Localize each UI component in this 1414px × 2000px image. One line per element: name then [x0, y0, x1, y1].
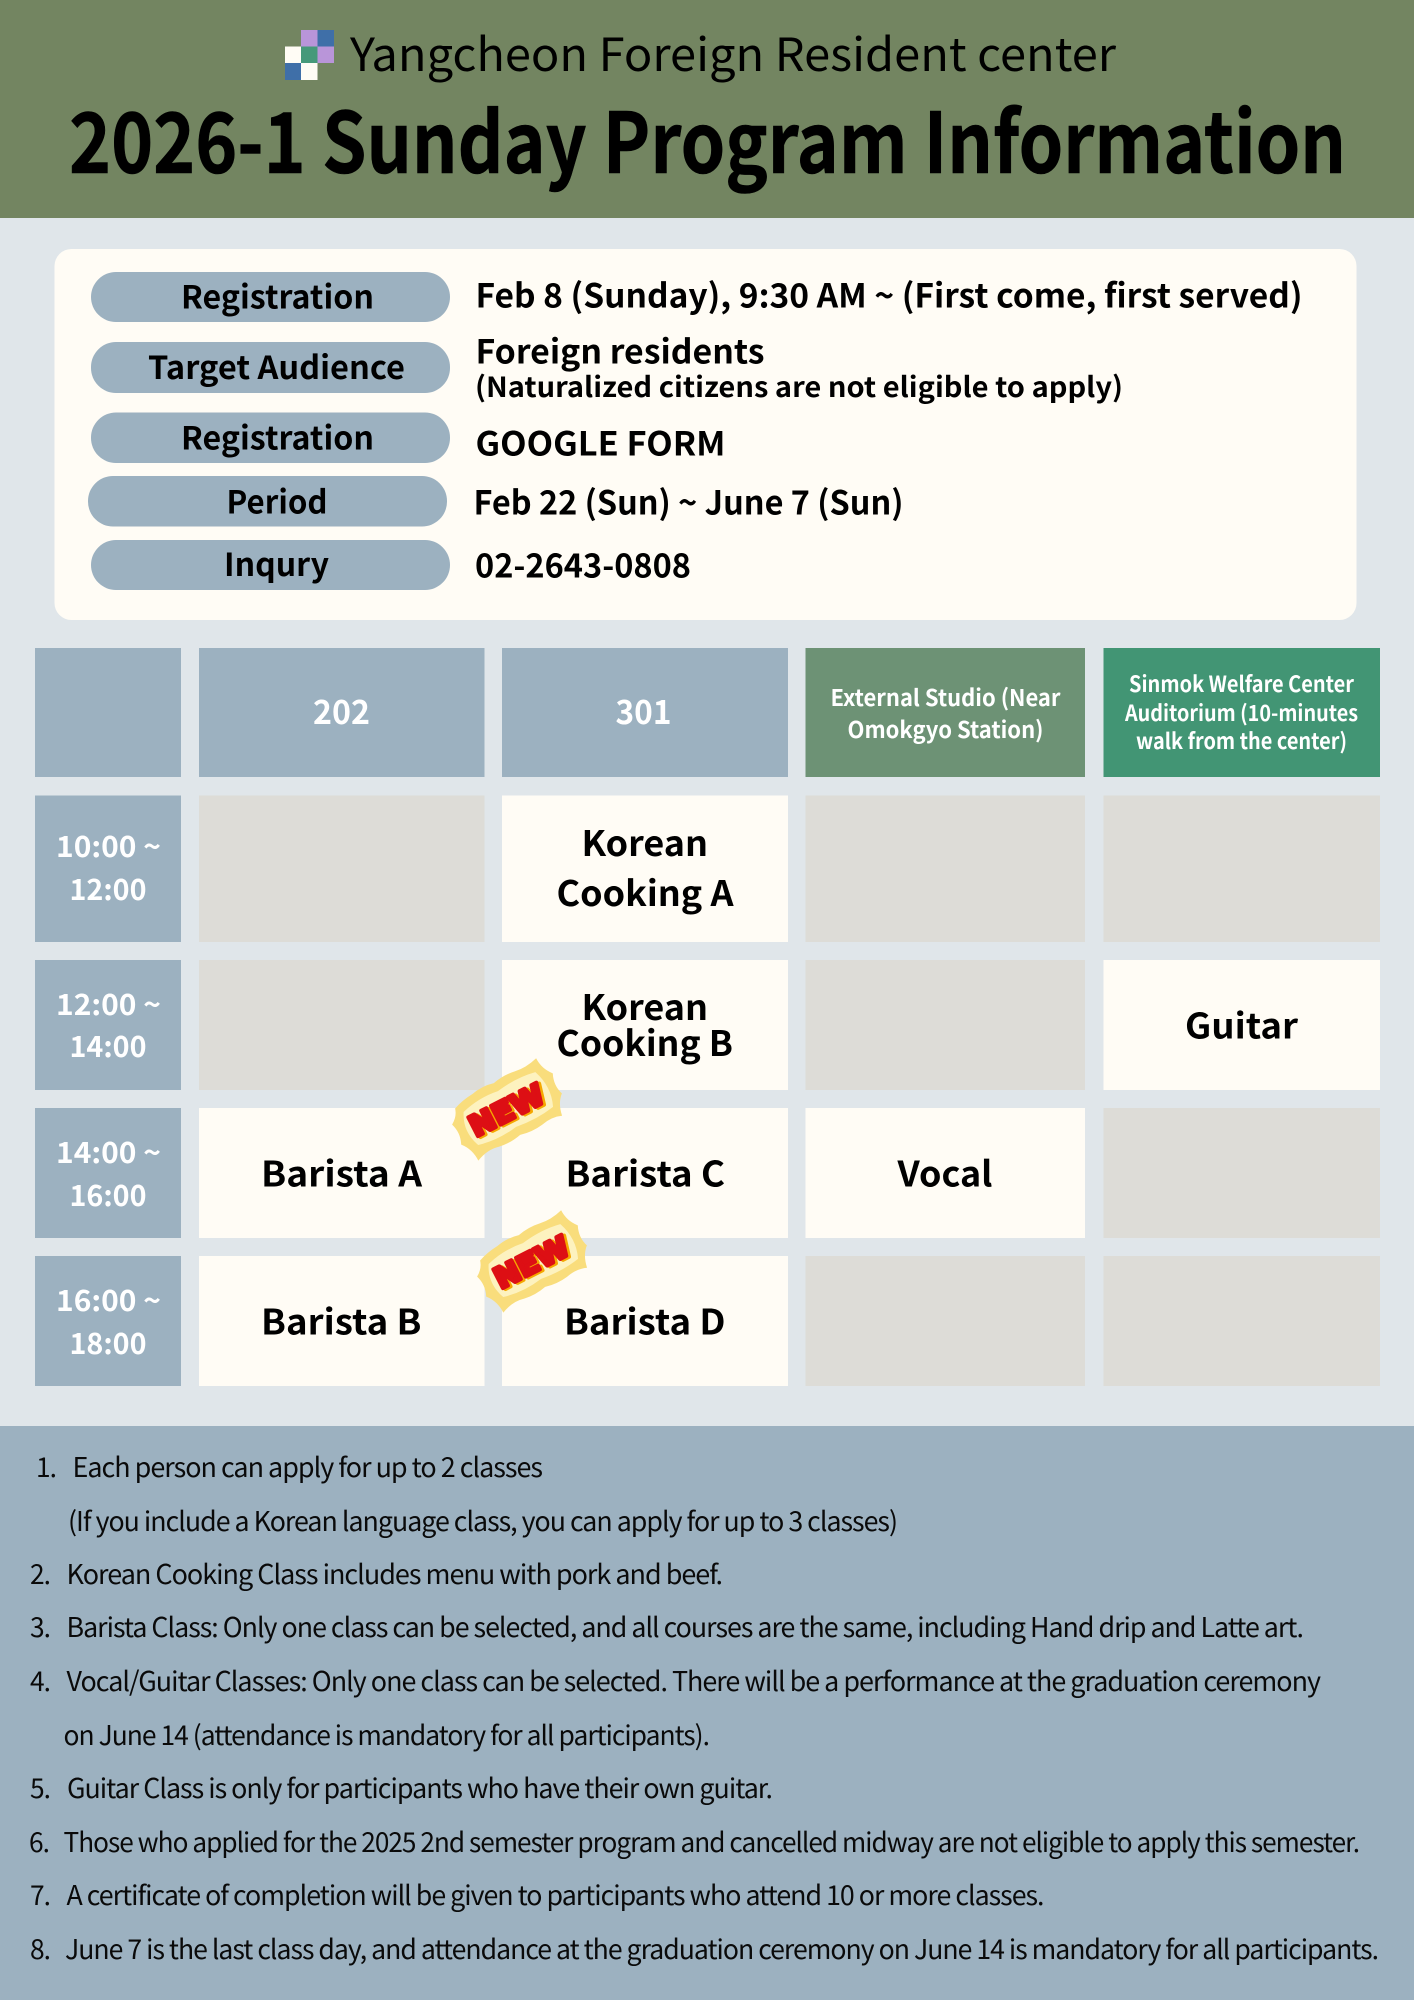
note 3: 3.	[30, 1606, 50, 1645]
table row: 10:00 to 12:00: Korean	[582, 816, 708, 867]
note 6: 6.	[29, 1821, 49, 1860]
badge: NEW on Barista D: NEW	[488, 1229, 575, 1296]
note 1: 1.	[36, 1446, 56, 1485]
table row: 14:00 to 16:00: Barista A	[261, 1146, 423, 1198]
note 4	[30, 1660, 1321, 1753]
note 7: 7.	[30, 1874, 50, 1913]
row: registration date: Feb 8 (Sunday), 9:30 AM ~ (First come, first served)	[476, 270, 1302, 318]
badge: NEW on Barista D: NEW	[491, 1230, 578, 1297]
table row: 10:00 to 12:00: 12:00	[70, 867, 146, 909]
note 8: 8.	[30, 1928, 50, 1967]
note 1: (If you include a Korean language class, you can apply for up to 3 classes)	[68, 1500, 897, 1539]
table header row: External Studio (Near	[830, 679, 1061, 713]
table row: 12:00 to 14:00: 12:00 ~	[56, 982, 161, 1024]
note 5: 5.	[30, 1767, 50, 1806]
table row: 12:00 to 14:00: 14:00	[70, 1024, 146, 1066]
subtitle: center name: Yangcheon Foreign Resident center	[349, 19, 1116, 85]
icon: center logo mosaic	[285, 30, 334, 80]
note 3: Barista Class: Only one class can be selected, and all courses are the same, including Hand drip and Latte art.	[66, 1606, 1303, 1645]
table row: 10:00 to 12:00: 10:00 ~	[56, 824, 161, 866]
row: inquiry	[91, 540, 691, 590]
badge: NEW on Barista C: NEW	[463, 1077, 550, 1144]
table header row	[35, 648, 1380, 777]
table row: 16:00 to 18:00: 16:00 ~	[56, 1278, 161, 1320]
timetable	[35, 648, 1380, 1386]
note 4: 4.	[30, 1660, 50, 1699]
badge: NEW on Barista C	[442, 1055, 573, 1164]
row: registration method: Registration	[181, 414, 374, 460]
note 8: June 7 is the last class day, and attendance at the graduation ceremony on June 14 is mandatory for all participants.	[65, 1928, 1378, 1967]
note 2: 2.	[30, 1553, 50, 1592]
row: registration date	[91, 270, 1302, 322]
row: target audience: Foreign residents	[476, 326, 764, 374]
table header row: Auditorium (10-minutes	[1124, 696, 1358, 728]
table row: 14:00 to 16:00: 16:00	[70, 1173, 146, 1215]
note 2: Korean Cooking Class includes menu with pork and beef.	[66, 1553, 722, 1592]
header banner	[0, 0, 1414, 218]
table row: 14:00 to 16:00: Vocal	[896, 1146, 992, 1198]
table header row: 301	[616, 686, 672, 734]
row: period: Feb 22 (Sun) ~ June 7 (Sun)	[474, 476, 904, 524]
table row: 14:00 to 16:00	[35, 1108, 1380, 1238]
note 6: Those who applied for the 2025 2nd semester program and cancelled midway are not eligible to apply this semester.	[64, 1821, 1359, 1860]
table header row: 202	[313, 686, 370, 734]
table header row: Omokgyo Station)	[848, 711, 1044, 745]
row: registration method: GOOGLE FORM	[476, 418, 726, 466]
row: registration date: Registration	[181, 272, 374, 318]
table header row: Sinmok Welfare Center	[1129, 667, 1354, 699]
note 4: on June 14 (attendance is mandatory for all participants).	[64, 1714, 709, 1753]
panel: notes	[0, 1426, 1414, 2000]
table row: 12:00 to 14:00: Korean	[582, 980, 708, 1031]
table row: 12:00 to 14:00	[35, 960, 1380, 1090]
note 1	[36, 1446, 897, 1539]
table row: 14:00 to 16:00: 14:00 ~	[56, 1130, 161, 1172]
table header row: walk from the center)	[1136, 724, 1347, 756]
table row: 14:00 to 16:00: Barista C	[566, 1146, 725, 1198]
row: target audience: Target Audience	[148, 343, 405, 389]
row: target audience: (Naturalized citizens are not eligible to apply)	[475, 366, 1123, 406]
note 4: Vocal/Guitar Classes: Only one class can be selected. There will be a performance at the graduation ceremony	[66, 1660, 1321, 1699]
table row: 10:00 to 12:00	[35, 796, 1380, 942]
table row: 16:00 to 18:00: Barista D	[564, 1294, 726, 1346]
table row: 16:00 to 18:00: Barista B	[261, 1294, 422, 1346]
table row: 12:00 to 14:00: Cooking B	[556, 1016, 733, 1067]
note 1: Each person can apply for up to 2 classes	[72, 1446, 542, 1485]
table row: 10:00 to 12:00: Cooking A	[556, 866, 734, 917]
table row: 16:00 to 18:00: 18:00	[70, 1321, 146, 1363]
note 7: A certificate of completion will be given to participants who attend 10 or more classes.	[66, 1874, 1044, 1913]
table row: 16:00 to 18:00	[35, 1256, 1380, 1386]
table row: 12:00 to 14:00: Guitar	[1185, 998, 1299, 1050]
panel: program information	[54, 249, 1356, 620]
badge: NEW on Barista C: NEW	[466, 1078, 553, 1145]
row: inquiry: 02-2643-0808	[475, 540, 691, 588]
row: period	[88, 476, 904, 526]
row: target audience	[91, 326, 1123, 406]
row: inquiry: Inqury	[224, 540, 329, 586]
badge: NEW on Barista D	[467, 1207, 598, 1316]
row: registration method	[91, 412, 726, 466]
note 5: Guitar Class is only for participants who have their own guitar.	[67, 1767, 772, 1806]
row: period: Period	[226, 478, 328, 524]
